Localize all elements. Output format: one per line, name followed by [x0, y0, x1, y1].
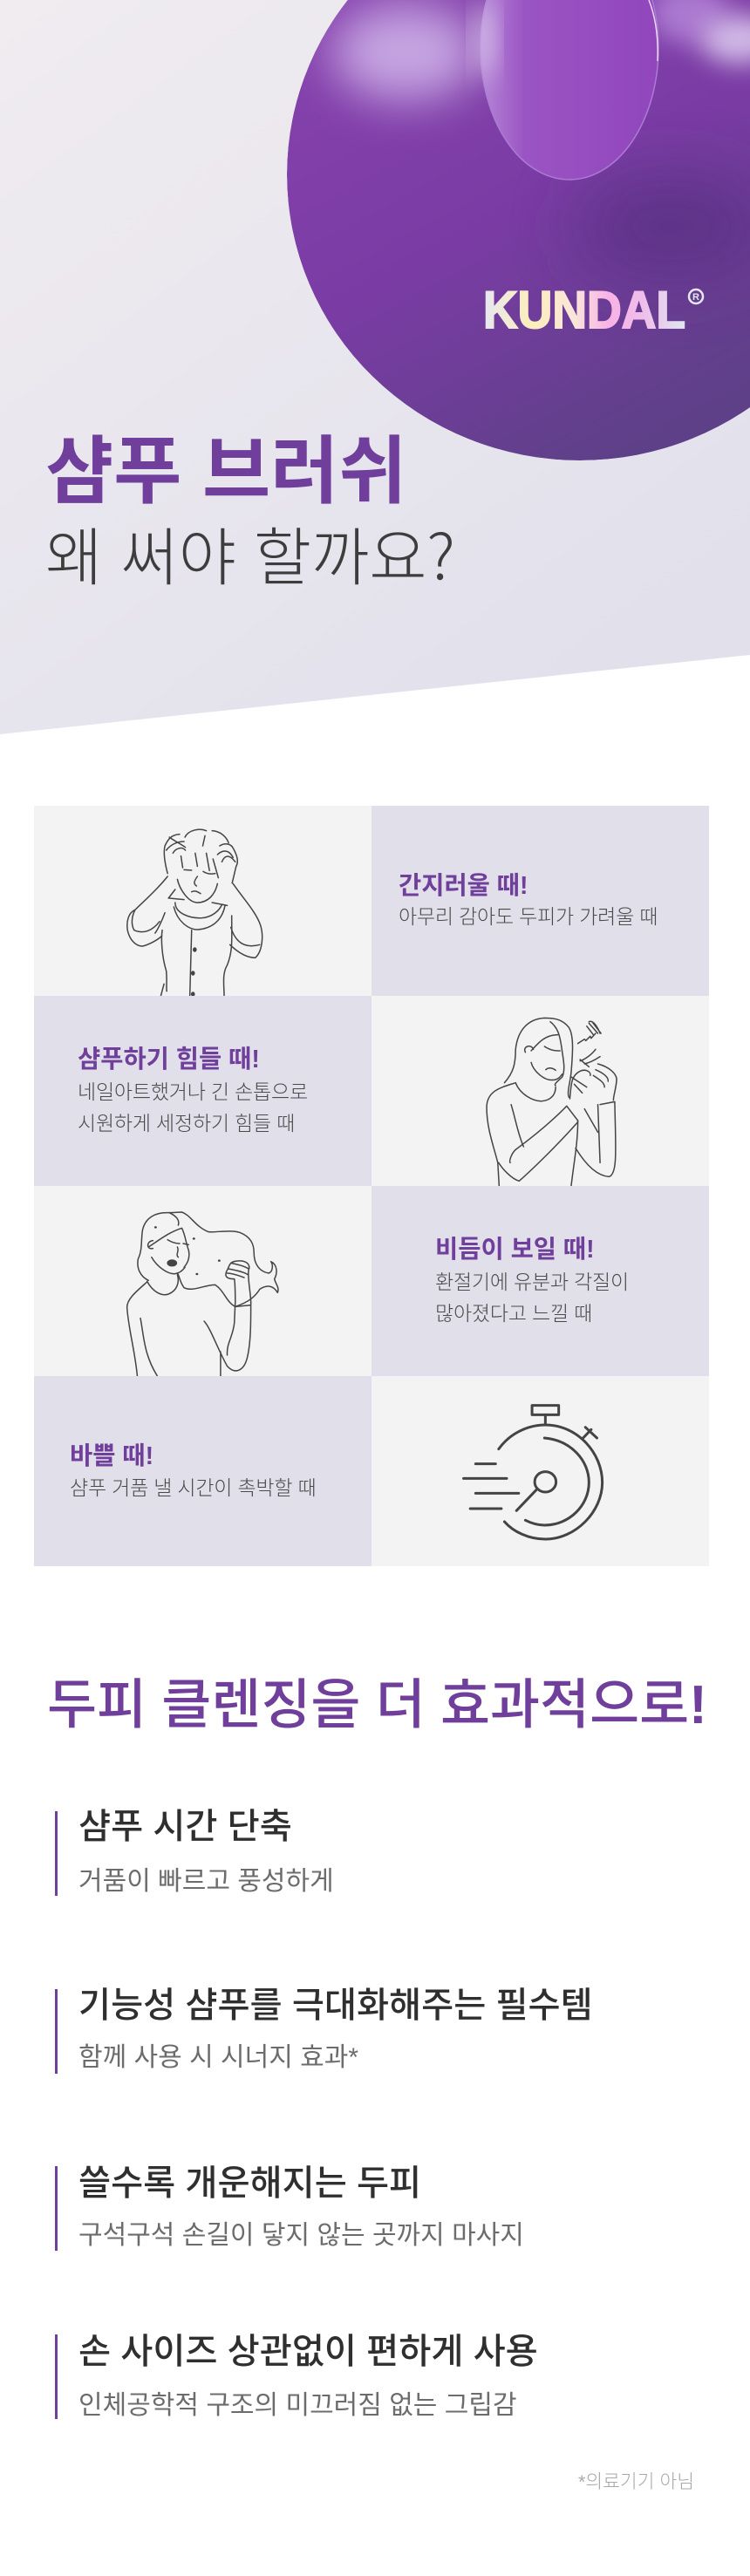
panel: hard shampoo text [34, 996, 372, 1186]
panel: itchy text [372, 806, 709, 996]
panel: dandruff illustration [34, 1186, 372, 1376]
benefit 1 [55, 1811, 668, 1896]
benefit 1 description: 거품이 빠르고 풍성하게 [78, 1867, 334, 1896]
section heading: 두피 클렌징을 더 효과적으로! [47, 1675, 707, 1735]
panel: stopwatch icon [372, 1376, 709, 1566]
panel: busy text [34, 1376, 372, 1566]
hard shampoo description: 네일아트했거나 긴 손톱으로 [78, 1080, 308, 1103]
hard shampoo description: 시원하게 세정하기 힘들 때 [78, 1112, 295, 1135]
busy heading: 바쁠 때! [70, 1442, 153, 1470]
hero panel [0, 0, 750, 734]
itchy description: 아무리 감아도 두피가 가려울 때 [399, 905, 658, 928]
panel: dandruff text [372, 1186, 709, 1376]
benefit 2 [55, 1989, 668, 2074]
logo: KUNDAL: KUNDAL [483, 281, 685, 339]
hero heading: purple: 샴푸 브러쉬 [45, 431, 407, 514]
benefit 2 title: 기능성 샴푸를 극대화해주는 필수템 [78, 1986, 593, 2025]
benefit 3 [55, 2166, 668, 2251]
benefit 2 description: 함께 사용 시 시너지 효과* [78, 2043, 358, 2072]
footnote: *의료기기 아님 [578, 2471, 694, 2492]
panel: nails illustration [372, 996, 709, 1186]
hard shampoo heading: 샴푸하기 힘들 때! [78, 1046, 260, 1073]
brush product [287, 0, 750, 460]
hard shampoo description [78, 1080, 308, 1135]
benefit 3 title: 쓸수록 개운해지는 두피 [78, 2164, 421, 2203]
dandruff description: 많아졌다고 느낄 때 [435, 1302, 592, 1325]
benefit 4 title: 손 사이즈 상관없이 편하게 사용 [78, 2332, 538, 2371]
benefit 1 title: 샴푸 시간 단축 [78, 1807, 292, 1846]
benefit 4 description: 인체공학적 구조의 미끄러짐 없는 그립감 [78, 2391, 517, 2420]
logo: KUNDAL: R [692, 292, 699, 303]
panel: itchy illustration [34, 806, 372, 996]
dandruff description: 환절기에 유분과 각질이 [435, 1271, 629, 1293]
hero heading: subtitle: 왜 써야 할까요? [45, 507, 455, 598]
benefit 3 description: 구석구석 손길이 닿지 않는 곳까지 마사지 [78, 2221, 524, 2250]
busy description: 샴푸 거품 낼 시간이 촉박할 때 [70, 1476, 316, 1499]
itchy heading: 간지러울 때! [399, 872, 528, 900]
dandruff description [435, 1271, 629, 1325]
benefit 4 [55, 2334, 668, 2419]
dandruff heading: 비듬이 보일 때! [435, 1236, 595, 1264]
